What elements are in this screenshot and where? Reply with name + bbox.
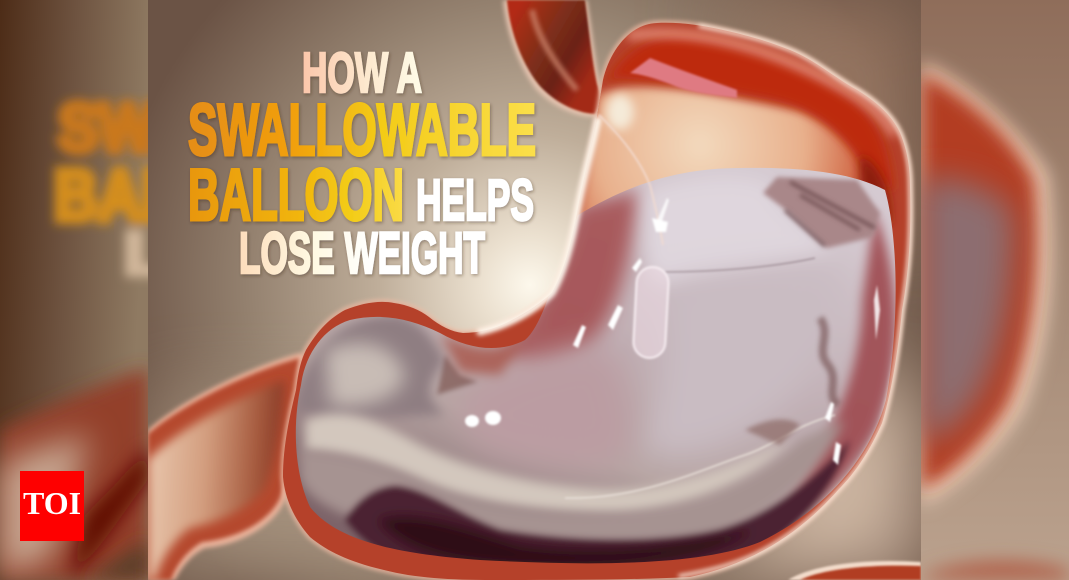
- lumen base: [296, 168, 896, 544]
- deepest shadow: [380, 517, 750, 567]
- pink fold: [630, 58, 737, 98]
- cream band: [305, 414, 790, 512]
- stomach lumen: [296, 168, 896, 564]
- thin wrinkle line: [665, 258, 815, 272]
- swallowable balloon capsule: [633, 266, 669, 359]
- logo: TOI: TOI: [23, 485, 81, 521]
- food line: [565, 415, 835, 498]
- panel: blurred left backdrop: BALLOON: [54, 156, 354, 236]
- panel: blurred right backdrop: [921, 0, 1069, 580]
- left dome light: [325, 343, 405, 406]
- right wall tint: [791, 213, 896, 520]
- upper red fold: [606, 36, 893, 190]
- title line: Lose weight: LOSE WEIGHT: [239, 221, 485, 286]
- dark bottom contents: [345, 440, 850, 574]
- lumen bright patch: [645, 177, 830, 286]
- title: [188, 41, 536, 286]
- neck and right edge white glow: [480, 26, 910, 576]
- dark shadow near wall: [860, 155, 890, 225]
- title line: Helps: HELPS: [416, 168, 534, 233]
- upper chamber: [578, 81, 862, 214]
- panel: blurred left backdrop: LOSE: [124, 220, 324, 287]
- highlight inside top-left of chamber: [606, 94, 634, 130]
- dark fold streaks: [785, 182, 875, 246]
- fold at upper right of lumen: [763, 177, 880, 248]
- panel: blurred left backdrop: SWALLOWABLE: [58, 90, 538, 166]
- dark squiggle marks: [820, 318, 838, 405]
- upper edge red of dome: [440, 333, 525, 375]
- pink middle: [455, 345, 631, 467]
- organ: bottom right intestine: [788, 561, 921, 580]
- panel: central image: [148, 0, 930, 580]
- panel: blurred left backdrop: [0, 0, 148, 580]
- brown marks: [745, 420, 800, 445]
- specular highlights: [465, 198, 880, 465]
- left grey dome: [295, 315, 445, 420]
- lumen left red tint: [500, 190, 640, 363]
- title line: Swallowable: SWALLOWABLE: [188, 90, 536, 171]
- logo: TOI: [20, 471, 84, 541]
- duodenum: [148, 353, 308, 580]
- stomach glow outline: [283, 23, 910, 580]
- title line: How a: HOW A: [302, 41, 422, 105]
- title line: Balloon: BALLOON: [188, 155, 404, 236]
- balloon tube: [599, 115, 663, 245]
- stomach body: [270, 0, 930, 580]
- stomach wall: [270, 0, 930, 580]
- background glow: [148, 0, 921, 580]
- rim highlight: [628, 33, 895, 135]
- lower gray-beige area: [300, 420, 845, 544]
- esophagus: [503, 0, 602, 117]
- central bright patch: [642, 323, 796, 464]
- brown fold shadow: [437, 355, 478, 395]
